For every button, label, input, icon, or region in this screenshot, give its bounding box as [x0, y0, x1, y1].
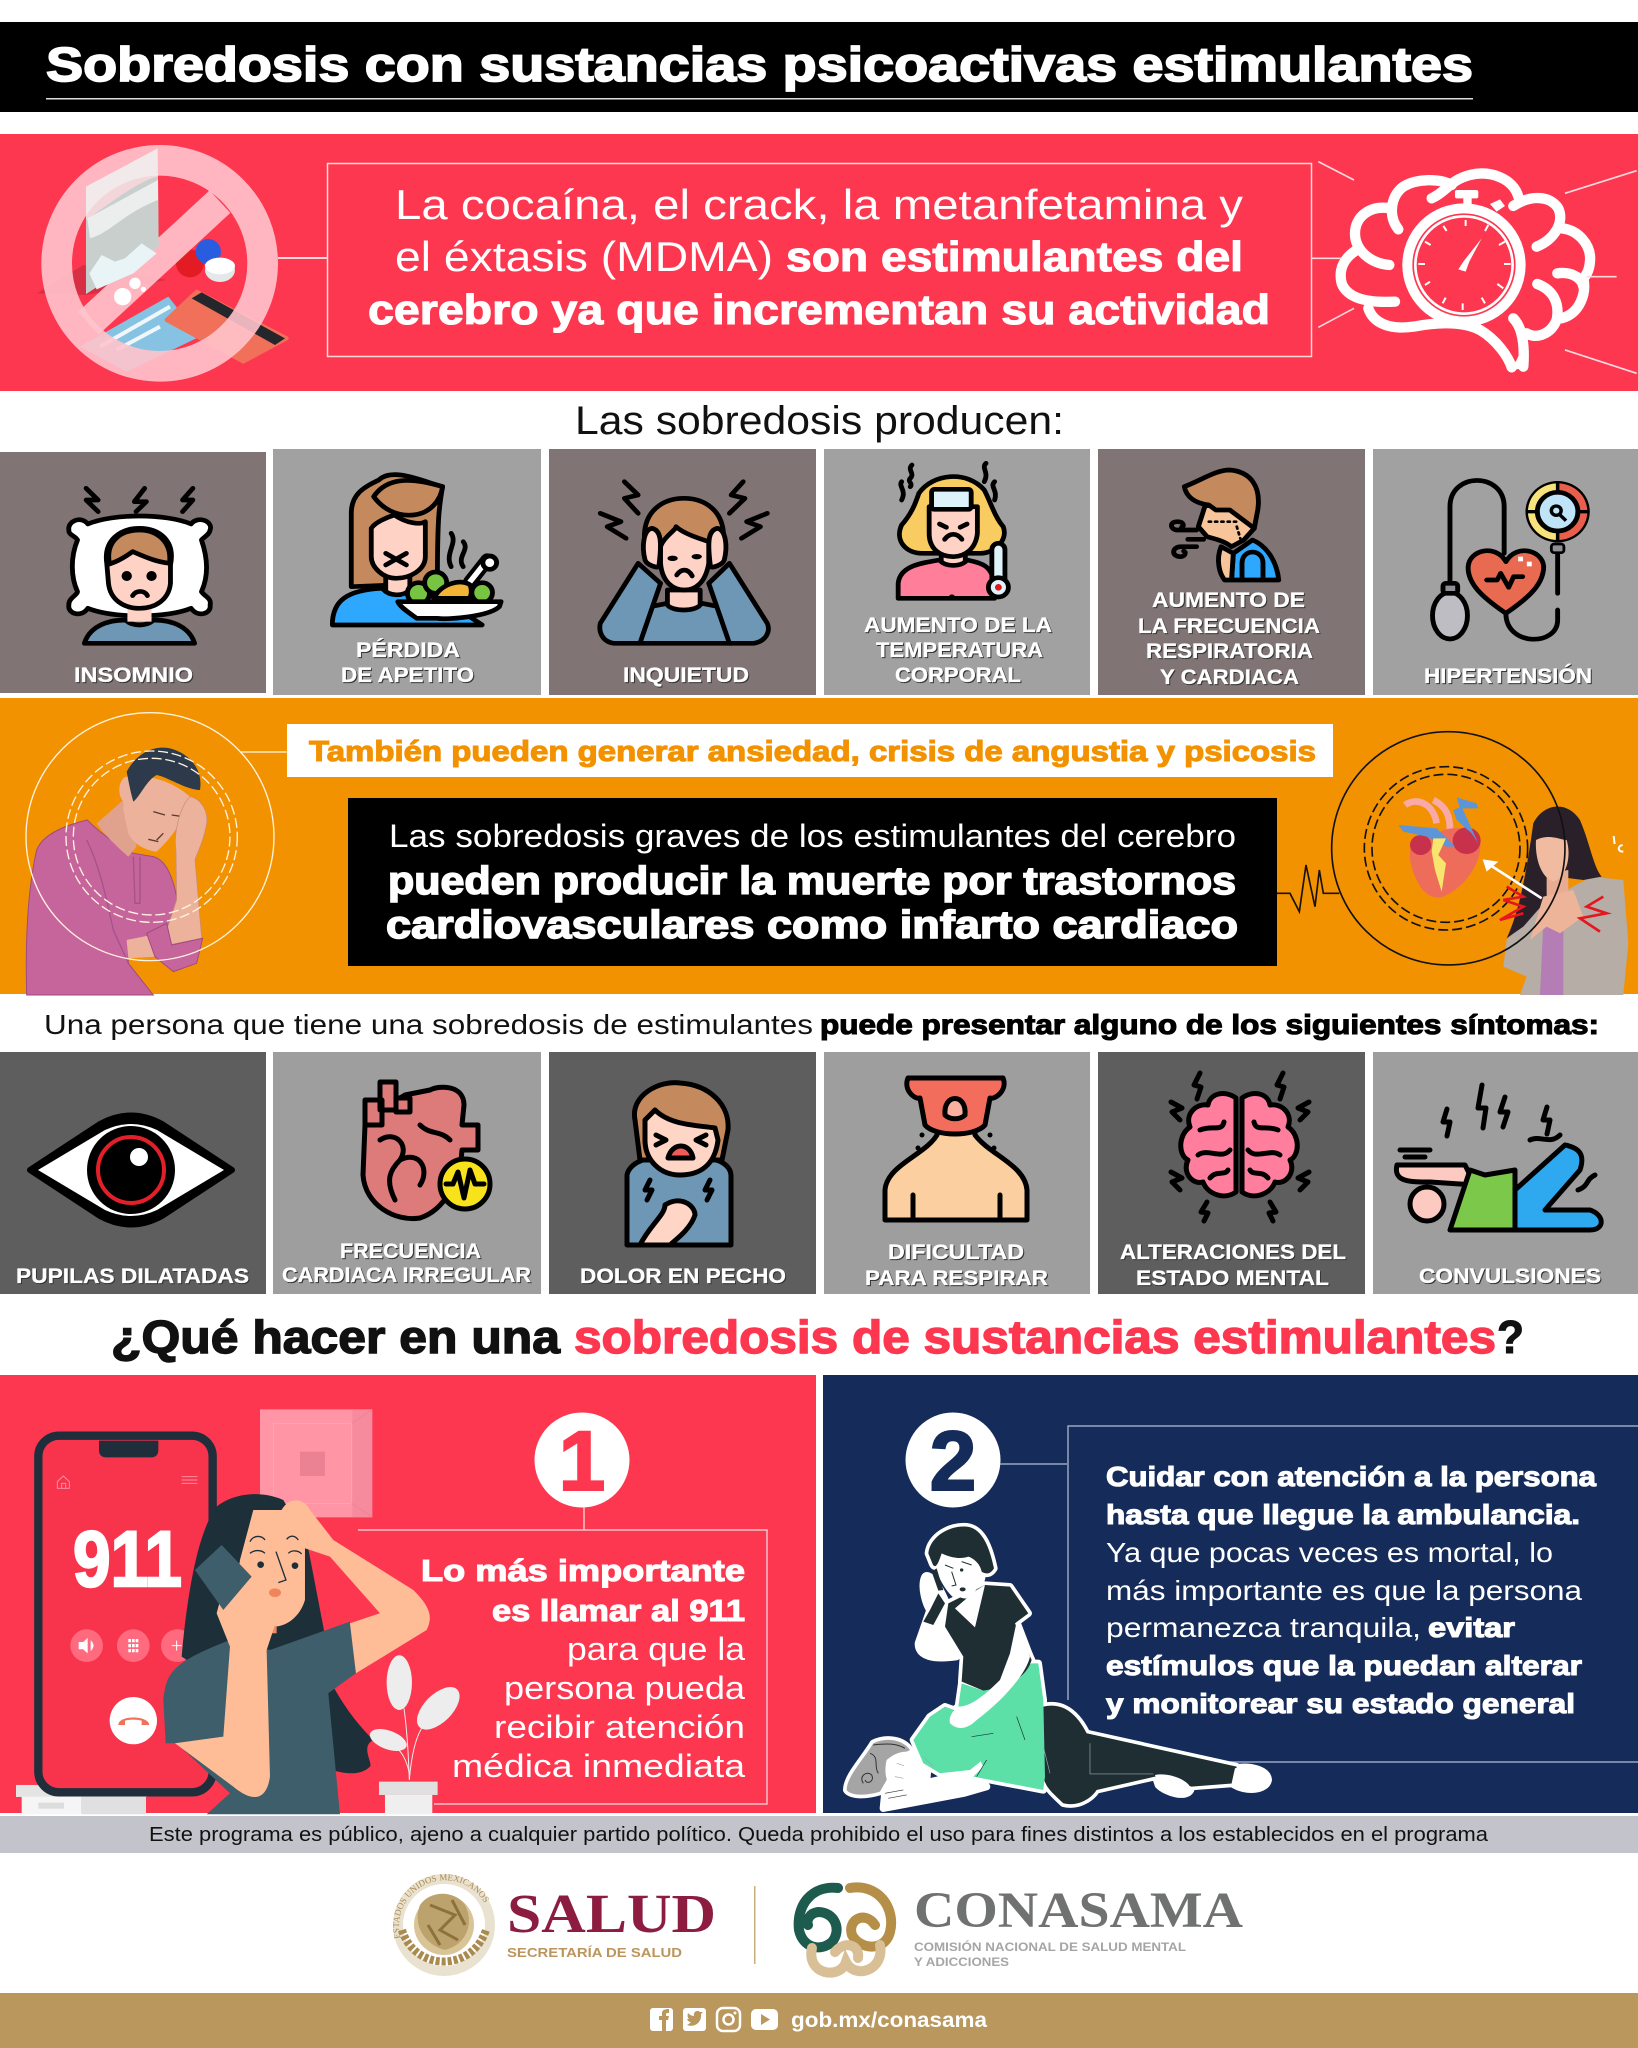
icon: boy with chest pain [627, 1083, 731, 1245]
icon: convulsions [1396, 1085, 1601, 1230]
icon: blood pressure [1433, 480, 1590, 639]
panel: step 1 [0, 1375, 816, 1814]
text box: care: evitar [1428, 1612, 1515, 1643]
callout: severe overdose [348, 798, 1277, 966]
panel: aumento de la temperatura corporal: AUMENTO DE LA [864, 614, 1052, 637]
text box: call 911 [358, 1507, 767, 1804]
illustration: woman with heart attack [1277, 732, 1628, 995]
panel: anxiety and cardiovascular warning [0, 698, 1638, 995]
icon: conasama swirl [799, 1887, 891, 1973]
divider [754, 1886, 756, 1964]
text box: el éxtasis (MDMA) [395, 233, 773, 280]
icon: breathing [1171, 470, 1279, 580]
panel: alteraciones del estado mental: ESTADO MENTAL [1136, 1267, 1329, 1290]
text box: cerebro ya que incrementan su actividad [368, 286, 1270, 333]
panel: perdida de apetito [273, 449, 541, 695]
logo: conasama: COMISIÓN NACIONAL DE SALUD MENTAL [914, 1939, 1186, 1954]
logo: conasama: Y ADICCIONES [914, 1955, 1009, 1969]
text box: care: estímulos que la puedan alterar [1106, 1650, 1582, 1681]
text box: care [1000, 1426, 1638, 1762]
panel: aumento de la temperatura corporal: CORPORAL [895, 664, 1021, 687]
icon: insomnia [69, 488, 211, 643]
logo: salud: SALUD [507, 1883, 716, 1944]
heading: what to do [111, 1311, 1524, 1363]
footer bar: gob.mx/conasama [791, 2009, 987, 2032]
text box: call 911: recibir atención [494, 1709, 745, 1745]
panel: dolor en pecho: DOLOR EN PECHO [580, 1265, 786, 1288]
text: symptoms intro: puede presentar alguno de los siguientes síntomas: [820, 1009, 1599, 1040]
icon: throat [885, 1078, 1027, 1220]
heading: what to do: ¿Qué hacer en una [111, 1311, 560, 1363]
callout: severe overdose: cardiovasculares como infarto cardiaco [386, 904, 1238, 947]
panel: perdida de apetito: DE APETITO [341, 664, 474, 687]
panel: pupilas dilatadas: PUPILAS DILATADAS [16, 1265, 249, 1288]
panel: aumento de la temperatura corporal: TEMPERATURA [876, 639, 1043, 662]
icon: restlessness [600, 482, 768, 643]
icon: loss of appetite [332, 475, 501, 625]
text: symptoms intro [44, 1009, 1599, 1040]
text box: care: más importante es que la persona [1106, 1575, 1582, 1606]
illustration: woman calling 911 [16, 1409, 467, 1814]
phone number: 911 [73, 1514, 182, 1603]
text box: call 911: es llamar al 911 [492, 1593, 745, 1628]
callout: severe overdose: pueden producir la muerte por trastornos [388, 860, 1236, 903]
panel: convulsiones: CONVULSIONES [1419, 1265, 1601, 1288]
text box: care: hasta que llegue la ambulancia. [1106, 1499, 1580, 1530]
text: symptoms intro: Una persona que tiene una sobredosis de estimulantes [44, 1009, 813, 1040]
icon: brain with stopwatch [1312, 162, 1637, 373]
text box: call 911: Lo más importante [421, 1553, 745, 1588]
panel: aumento de la frecuencia respiratoria y cardiaca [1098, 449, 1365, 695]
icon: brain [1171, 1073, 1309, 1221]
icon: fever [898, 463, 1008, 600]
icon: heart [363, 1082, 490, 1219]
logo: conasama [799, 1883, 1243, 1973]
panel: stimulants intro [0, 134, 1638, 391]
panel: hipertension [1373, 449, 1638, 695]
icon: national seal: ESTADOS UNIDOS MEXICANOS [393, 1874, 489, 1939]
panel: insomnio [0, 452, 266, 693]
text box: call 911: para que la [567, 1631, 745, 1667]
heading: what to do: ? [1497, 1311, 1524, 1363]
panel: dificultad para respirar: PARA RESPIRAR [865, 1267, 1048, 1290]
panel: convulsiones [1373, 1052, 1638, 1294]
illustration: man with headache [26, 713, 287, 995]
footer bar [0, 1993, 1638, 2048]
icon: eye [30, 1116, 232, 1224]
illustration: caregiver with patient [847, 1527, 1268, 1808]
panel: inquietud [549, 449, 816, 695]
icon: prohibited drugs [37, 148, 327, 372]
panel: aumento de la frecuencia respiratoria y cardiaca: LA FRECUENCIA [1138, 615, 1320, 638]
title: Sobredosis con sustancias psicoactivas estimulantes [46, 39, 1473, 92]
panel: alteraciones del estado mental [1098, 1052, 1365, 1294]
title [0, 22, 1638, 112]
panel: aumento de la frecuencia respiratoria y cardiaca: AUMENTO DE [1152, 589, 1305, 612]
text box [328, 164, 1312, 356]
panel: inquietud: INQUIETUD [623, 664, 749, 687]
disclaimer bar: Este programa es público, ajeno a cualquier partido político. Queda prohibido el uso para fines distintos a los establecidos en el programa [149, 1824, 1489, 1846]
panel: pupilas dilatadas [0, 1052, 266, 1294]
badge: number 1: 1 [559, 1414, 605, 1508]
panel: dificultad para respirar [824, 1052, 1090, 1294]
panel: insomnio: INSOMNIO [74, 664, 193, 687]
logo: conasama: CONASAMA [914, 1883, 1243, 1939]
disclaimer bar [0, 1816, 1638, 1853]
callout: anxiety: También pueden generar ansiedad, crisis de angustia y psicosis [309, 736, 1316, 768]
callout: anxiety [287, 724, 1333, 777]
badge: number 2: 2 [930, 1414, 976, 1508]
logo: salud: SECRETARÍA DE SALUD [507, 1945, 682, 1960]
panel: hipertension: HIPERTENSIÓN [1424, 664, 1592, 688]
icon: national seal [393, 1874, 495, 1976]
text box: care: Cuidar con atención a la persona [1106, 1461, 1596, 1492]
panel: alteraciones del estado mental: ALTERACIONES DEL [1120, 1241, 1346, 1264]
text box: call 911: persona pueda [504, 1670, 745, 1706]
panel: aumento de la temperatura corporal [824, 449, 1090, 695]
text box: son estimulantes del [786, 233, 1243, 280]
callout: severe overdose: Las sobredosis graves de los estimulantes del cerebro [389, 818, 1236, 854]
panel: perdida de apetito: PÉRDIDA [356, 639, 460, 662]
text box: care: Ya que pocas veces es mortal, lo [1106, 1537, 1553, 1568]
panel: frecuencia cardiaca irregular [273, 1052, 541, 1294]
text box: La cocaína, el crack, la metanfetamina y [395, 181, 1243, 228]
heading: las sobredosis producen: Las sobredosis producen: [575, 399, 1064, 443]
heading: what to do: sobredosis de sustancias estimulantes [574, 1311, 1496, 1363]
text box: care: permanezca tranquila, [1106, 1612, 1421, 1643]
panel: dolor en pecho [549, 1052, 816, 1294]
panel: frecuencia cardiaca irregular: CARDIACA IRREGULAR [282, 1264, 531, 1287]
badge: number 1 [534, 1412, 630, 1508]
panel: frecuencia cardiaca irregular: FRECUENCIA [340, 1240, 481, 1263]
panel: dificultad para respirar: DIFICULTAD [888, 1241, 1024, 1264]
panel: aumento de la frecuencia respiratoria y cardiaca: RESPIRATORIA [1146, 640, 1313, 663]
text box: call 911: médica inmediata [452, 1748, 745, 1784]
icon: social networks [650, 2008, 778, 2031]
logo: salud [393, 1874, 716, 1976]
panel: step 2 [823, 1375, 1638, 1813]
badge: number 2 [906, 1412, 1000, 1508]
panel: aumento de la frecuencia respiratoria y cardiaca: Y CARDIACA [1160, 666, 1299, 689]
text box: care: y monitorear su estado general [1106, 1688, 1575, 1719]
